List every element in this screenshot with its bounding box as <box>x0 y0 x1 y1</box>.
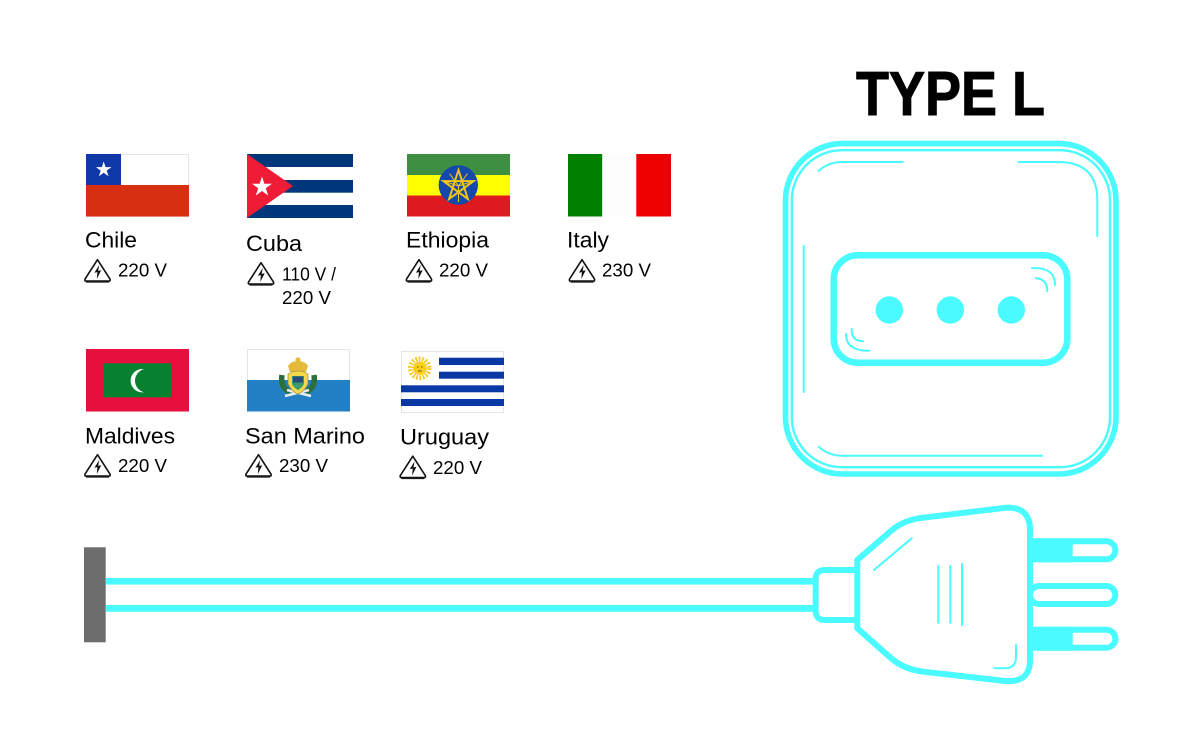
flag: Maldives <box>86 349 189 412</box>
name: Uruguay: Uruguay <box>400 424 489 449</box>
name: San Marino: San Marino <box>245 423 365 448</box>
icon: voltage warning <box>569 260 595 282</box>
country: Uruguay <box>400 352 504 479</box>
cord wires <box>106 578 818 612</box>
name: Maldives: Maldives <box>85 423 175 448</box>
name: Cuba: Cuba <box>246 231 303 256</box>
flag: Uruguay <box>401 352 504 412</box>
plug neck <box>816 570 856 620</box>
flag: Cuba <box>247 154 353 218</box>
country: Italy <box>567 154 671 282</box>
voltage: Chile: 220 V <box>118 260 168 281</box>
flag: Ethiopia <box>407 154 510 216</box>
country: San Marino <box>245 350 365 477</box>
socket <box>786 144 1116 474</box>
voltage: Cuba <box>282 264 337 308</box>
voltage: Cuba: 220 V <box>282 287 332 308</box>
country: Cuba <box>246 154 353 308</box>
flag: Chile <box>86 154 189 216</box>
icon: voltage warning <box>248 263 274 285</box>
icon: voltage warning <box>85 455 110 477</box>
plug <box>816 508 1115 681</box>
voltage: Ethiopia: 220 V <box>439 260 489 281</box>
name: Ethiopia: Ethiopia <box>406 228 490 252</box>
icon: voltage warning <box>246 455 271 477</box>
socket inner frame <box>792 150 1110 467</box>
voltage: San Marino: 230 V <box>279 455 329 476</box>
title: TYPE L <box>856 60 1045 129</box>
icon: voltage warning <box>400 456 425 479</box>
cord end cap <box>84 547 106 642</box>
voltage: Cuba: 110 V / <box>282 264 337 285</box>
plug pins <box>1030 538 1115 651</box>
icon: voltage warning <box>406 260 432 282</box>
voltage: Maldives: 220 V <box>118 455 168 476</box>
flag: San Marino <box>247 350 350 412</box>
name: Chile: Chile <box>85 228 137 252</box>
plug body <box>857 508 1030 681</box>
socket face highlights <box>846 268 1055 351</box>
icon: voltage warning <box>85 260 110 282</box>
socket face <box>834 255 1067 363</box>
socket holes <box>876 296 1025 324</box>
socket highlights <box>804 162 1097 456</box>
voltage: Italy: 230 V <box>602 260 652 281</box>
country: Maldives <box>85 349 189 477</box>
country: Chile <box>85 154 189 282</box>
plug highlights <box>874 538 1016 668</box>
socket outer frame <box>786 144 1116 474</box>
name: Italy: Italy <box>567 228 609 252</box>
country: Ethiopia <box>406 154 510 282</box>
flag: Italy <box>568 154 671 216</box>
voltage: Uruguay: 220 V <box>433 457 483 478</box>
